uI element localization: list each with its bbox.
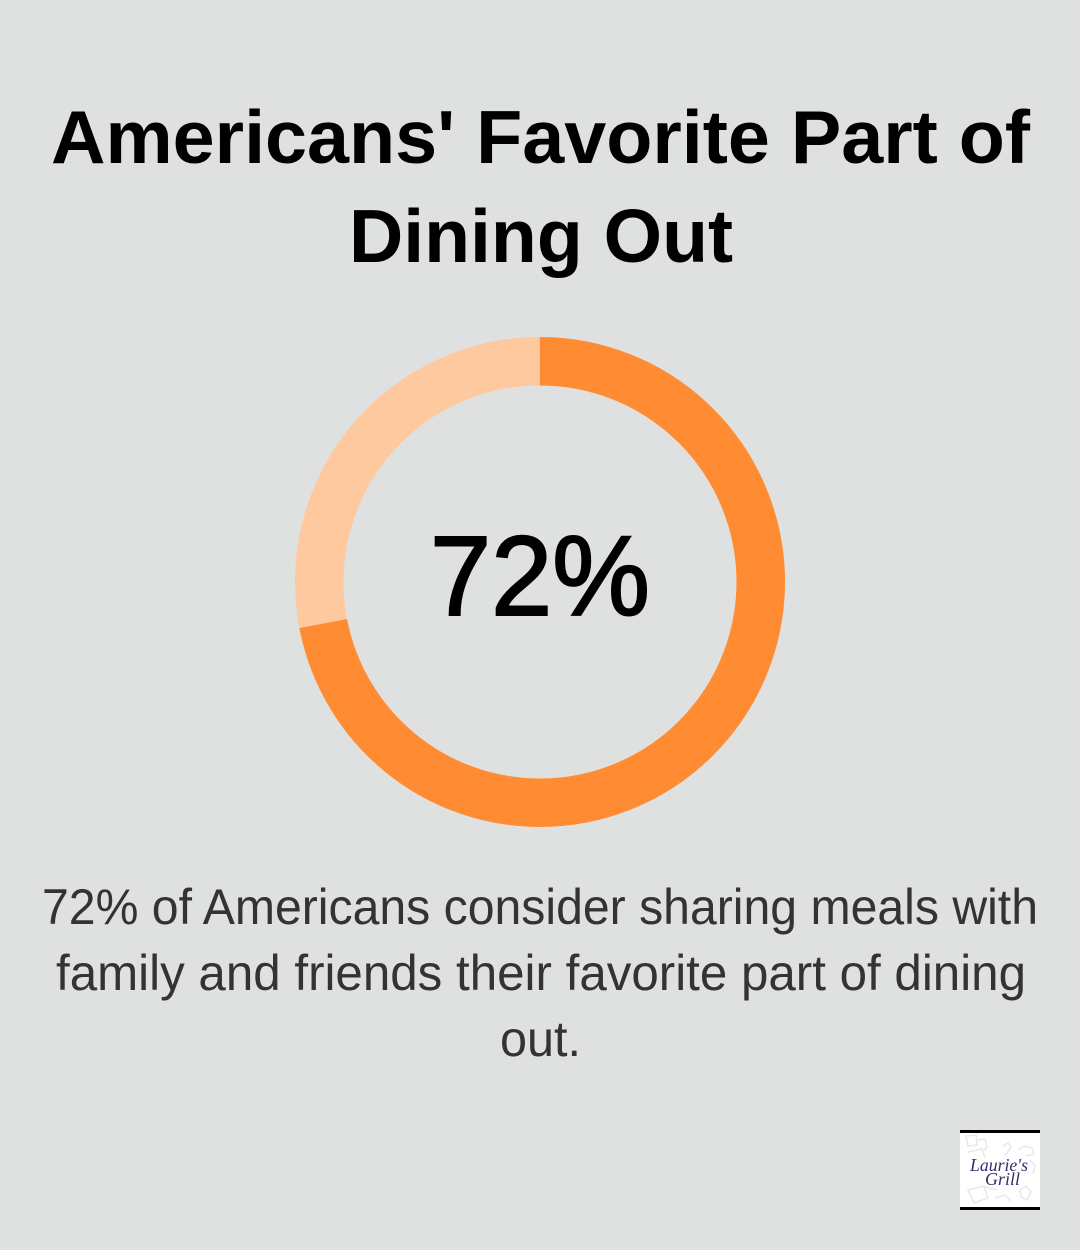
donut value: 72% xyxy=(430,513,650,639)
title: Dining Out xyxy=(349,194,733,278)
description text: 72% of Americans consider sharing meals with xyxy=(42,879,1038,935)
logo: Laurie's Grill xyxy=(960,1130,1040,1210)
title: Americans' Favorite Part of xyxy=(51,95,1031,179)
title xyxy=(51,95,1031,278)
description text: out. xyxy=(500,1011,581,1067)
description text xyxy=(42,879,1038,1067)
description text: family and friends their favorite part of dining xyxy=(56,945,1026,1001)
logo: Laurie's Grill: Laurie's xyxy=(969,1155,1028,1175)
donut chart: 72% xyxy=(319,361,761,803)
logo: Laurie's Grill: Grill xyxy=(985,1169,1020,1189)
